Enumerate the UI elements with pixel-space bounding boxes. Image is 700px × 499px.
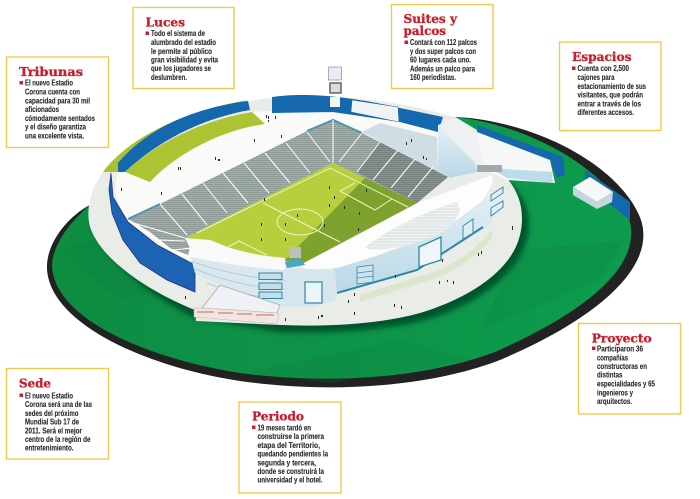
left blue wall [109, 173, 195, 292]
body text: entrar a través de los [578, 99, 641, 108]
body text: centro de la región de [25, 435, 91, 444]
body text: diferentes accesos. [578, 108, 634, 117]
body text: deslumbren. [151, 73, 187, 82]
front right facade [300, 175, 505, 293]
bullet [20, 81, 23, 84]
stands [128, 120, 448, 255]
teal connector [285, 258, 305, 268]
facade teal line [337, 227, 483, 293]
pavilion stripes [197, 312, 274, 315]
parking pavilion [573, 170, 630, 220]
window 1 [259, 273, 282, 280]
white roof [189, 240, 285, 270]
window 3 [259, 292, 282, 298]
body text: cajones para [578, 73, 615, 82]
heading: Proyecto: Proyecto [592, 330, 652, 345]
roof skylight [365, 202, 460, 250]
body text: etapa del Territorio, [258, 441, 320, 450]
body text: 2011. Será el mejor [25, 426, 82, 435]
black disk [47, 117, 643, 387]
blue strip [585, 170, 630, 220]
centre building [285, 247, 337, 307]
panel: Espacios [560, 42, 661, 130]
press box panel [351, 100, 399, 122]
people [121, 115, 513, 321]
facade large window [419, 237, 441, 267]
heading: Espacios: Espacios [572, 49, 632, 64]
body text: Mundial Sub 17 de [25, 418, 79, 427]
body text: donde se construirá la [258, 467, 324, 476]
body text: que los jugadores se [151, 64, 211, 73]
green lawn [52, 117, 631, 379]
box face [573, 187, 613, 209]
body text: constructoras en [597, 362, 647, 371]
panel: Luces [133, 8, 234, 88]
body text: compañías [597, 353, 628, 362]
front walkway stripe [360, 230, 493, 302]
body text: Además un palco para [410, 64, 475, 73]
body text: sedes del próximo [25, 409, 79, 418]
box roof [573, 177, 613, 202]
body text [578, 64, 646, 117]
lamp bottom [330, 97, 340, 107]
body text: Corona cuenta con [25, 88, 80, 96]
lawn shading [60, 232, 625, 383]
body text: cómodamente sentados [25, 114, 95, 123]
body text: El nuevo Estadio [25, 79, 73, 88]
panel: Sede [6, 368, 108, 459]
upper left green stand [103, 100, 248, 172]
stadium illustration [47, 67, 643, 387]
face [190, 254, 285, 307]
lamp middle [330, 83, 341, 93]
body text [597, 344, 655, 406]
body text: entretenimiento. [25, 444, 74, 453]
bullet [20, 394, 23, 397]
heading: Tribunas: Tribunas [19, 64, 83, 79]
upper windows [491, 187, 503, 216]
body text: Corona será una de las [25, 400, 92, 409]
centre wall [285, 268, 337, 307]
panel: Suites y palcos [392, 4, 493, 88]
facade vents [357, 265, 373, 284]
body text: capacidad para 30 mil [25, 96, 90, 105]
panel: Tribunas [6, 57, 108, 148]
body text: le permite al público [151, 47, 212, 56]
body text [410, 38, 477, 82]
stadium drop shadow [90, 178, 529, 332]
white roof [438, 118, 500, 172]
upper left blue band [118, 101, 250, 172]
lamp top [328, 67, 342, 80]
body text: Participaron 36 [597, 344, 643, 353]
panel: Proyecto [578, 324, 680, 414]
bullet [252, 426, 256, 429]
bullet [146, 32, 149, 35]
body text: 160 periodistas. [410, 73, 456, 82]
bullet [572, 66, 576, 70]
grey joint [477, 165, 502, 172]
centre window [305, 282, 322, 303]
body text: especialidades y 65 [597, 380, 655, 389]
body text: Cuenta con 2,500 [578, 64, 629, 73]
body text: alumbrado del estadio [151, 38, 216, 47]
body text [258, 423, 328, 485]
upper inner green stand [125, 112, 265, 182]
body text: ingenieros y [597, 388, 633, 397]
body text: estacionamiento de sus [578, 82, 646, 91]
body text: y el diseño garantiza [25, 123, 86, 132]
seating bowl [128, 120, 448, 255]
body text: Contará con 112 palcos [410, 38, 477, 47]
body text [25, 79, 95, 141]
left building [189, 240, 285, 307]
floors [191, 261, 285, 299]
body text: 60 lugares cada uno. [410, 56, 471, 65]
heading: Periodo: Periodo [252, 409, 304, 424]
heading: Sede: Sede [19, 376, 51, 390]
body text: distintas [597, 371, 623, 380]
pavilion roof [202, 285, 280, 313]
body text: El nuevo Estadio [25, 391, 73, 400]
light tower [328, 67, 342, 107]
stand trim [128, 120, 362, 219]
heading: Suites y palcos [404, 11, 458, 38]
body text: gran visibilidad y evita [151, 56, 218, 64]
facade small window [463, 219, 473, 239]
grass [185, 163, 417, 265]
panel: Periodo [239, 402, 341, 493]
pitch shadow [285, 178, 417, 265]
body text [25, 391, 92, 453]
outer concrete base [88, 96, 522, 326]
curved wall [438, 125, 477, 178]
wing face [490, 168, 553, 183]
top blue band [272, 95, 443, 132]
stair [289, 247, 301, 258]
east tower building [438, 118, 565, 183]
body text: quedando pendientes la [258, 450, 328, 459]
body text: universidad y el hotel. [258, 476, 322, 485]
body text: Todo el sistema de [151, 29, 205, 38]
big white roof [300, 175, 493, 270]
entrance pavilion [194, 285, 280, 324]
body text: construirse la primera [258, 432, 324, 441]
shaded seating [357, 142, 448, 203]
bullet [592, 346, 596, 350]
bullet [404, 40, 408, 44]
heading: Suites y palcos: palcos [404, 23, 446, 38]
body text: arquitectos. [597, 397, 632, 406]
football pitch [185, 163, 417, 265]
facade [333, 187, 505, 293]
window 2 [259, 283, 282, 290]
pavilion front [194, 308, 279, 324]
white concourse [115, 111, 448, 268]
body text: y dos super palcos con [410, 47, 476, 56]
centre circle [277, 209, 323, 235]
pitch lines [197, 168, 408, 255]
pale upper deck [362, 123, 450, 178]
body text: segunda y tercera, [258, 458, 316, 467]
body text: aficionados [25, 105, 59, 114]
wing roof [477, 132, 555, 183]
heading: Suites y palcos: Suites y [404, 11, 458, 26]
body text [151, 29, 218, 82]
body text: visitantes, que podrán [578, 91, 643, 100]
outer blue wall [477, 125, 565, 178]
heading: Luces: Luces [146, 14, 185, 30]
body text: 19 meses tardó en [258, 423, 311, 432]
body text: una excelente vista. [25, 132, 84, 141]
